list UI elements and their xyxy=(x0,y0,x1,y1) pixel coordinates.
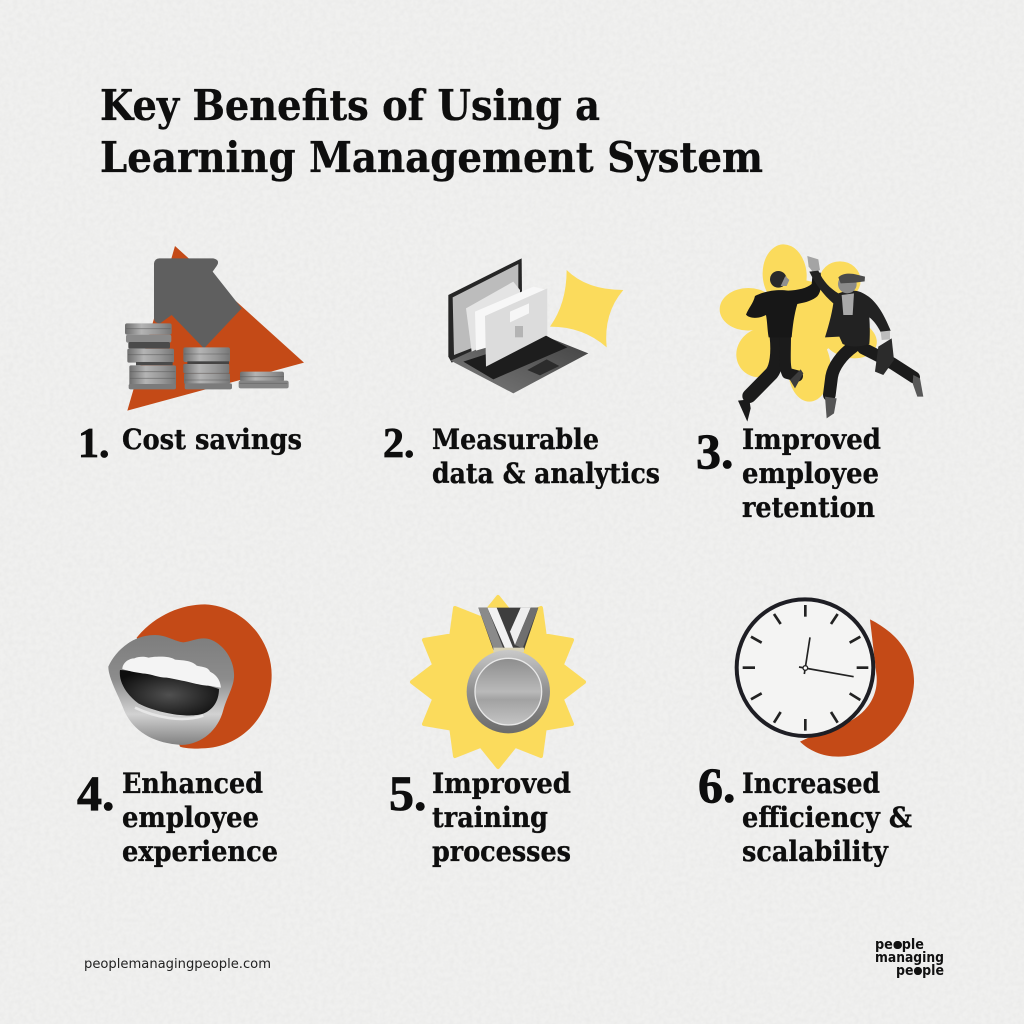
icon: wall clock with orange crescent xyxy=(737,599,914,757)
label: increased efficiency and scalability: efficiency & xyxy=(742,801,912,834)
panel: efficiency xyxy=(698,599,914,868)
label: cost savings: Cost savings xyxy=(122,423,302,456)
panel: cost savings xyxy=(78,246,304,467)
label: improved employee retention: 3. xyxy=(696,423,734,479)
label: increased efficiency and scalability xyxy=(698,757,912,868)
label: measurable data and analytics: 2. xyxy=(383,421,414,467)
label: cost savings xyxy=(78,421,302,467)
label: improved employee retention: Improved xyxy=(742,423,881,456)
logo: people xyxy=(896,963,944,979)
label: measurable data and analytics xyxy=(383,421,660,490)
label: enhanced employee experience: 4. xyxy=(77,765,114,821)
label: increased efficiency and scalability: 6. xyxy=(698,757,736,813)
icon: medal on yellow starburst xyxy=(412,597,584,767)
label: enhanced employee experience xyxy=(77,765,278,868)
footer website: peoplemanagingpeople.com xyxy=(84,957,271,972)
label: enhanced employee experience: Enhanced xyxy=(122,767,263,800)
title: Key Benefits of Using a xyxy=(100,81,600,130)
label: improved training processes: 5. xyxy=(389,765,426,821)
icon: laughing mouth on orange circle xyxy=(108,604,272,749)
panel: measurable data xyxy=(383,258,660,490)
label: enhanced employee experience: experience xyxy=(122,835,278,868)
label: improved employee retention: employee xyxy=(742,457,879,490)
label: measurable data and analytics: Measurable xyxy=(432,423,599,456)
label: improved training processes: processes xyxy=(432,835,571,868)
panel: employee experience xyxy=(77,604,278,868)
logo: managing xyxy=(875,950,944,966)
panel: training processes xyxy=(389,597,584,868)
icon: laptop with files and yellow star xyxy=(448,258,623,393)
label: cost savings: 1. xyxy=(78,421,110,467)
icon: two businessmen high-fiving on yellow flower xyxy=(720,243,923,422)
label: increased efficiency and scalability: Increased xyxy=(742,767,880,800)
label: measurable data and analytics: data & analytics xyxy=(432,457,660,490)
label: improved training processes xyxy=(389,765,571,868)
icon: coins and arrow on orange triangle xyxy=(125,246,304,411)
title: Learning Management System xyxy=(100,133,763,182)
label: improved employee retention xyxy=(696,423,881,524)
logo: people xyxy=(875,937,924,953)
label: increased efficiency and scalability: scalability xyxy=(742,835,889,868)
label: improved training processes: training xyxy=(432,801,548,834)
title xyxy=(100,81,763,182)
label: improved employee retention: retention xyxy=(742,491,875,524)
logo xyxy=(875,937,944,979)
label: enhanced employee experience: employee xyxy=(122,801,259,834)
panel: employee retention xyxy=(696,243,923,524)
label: improved training processes: Improved xyxy=(432,767,571,800)
